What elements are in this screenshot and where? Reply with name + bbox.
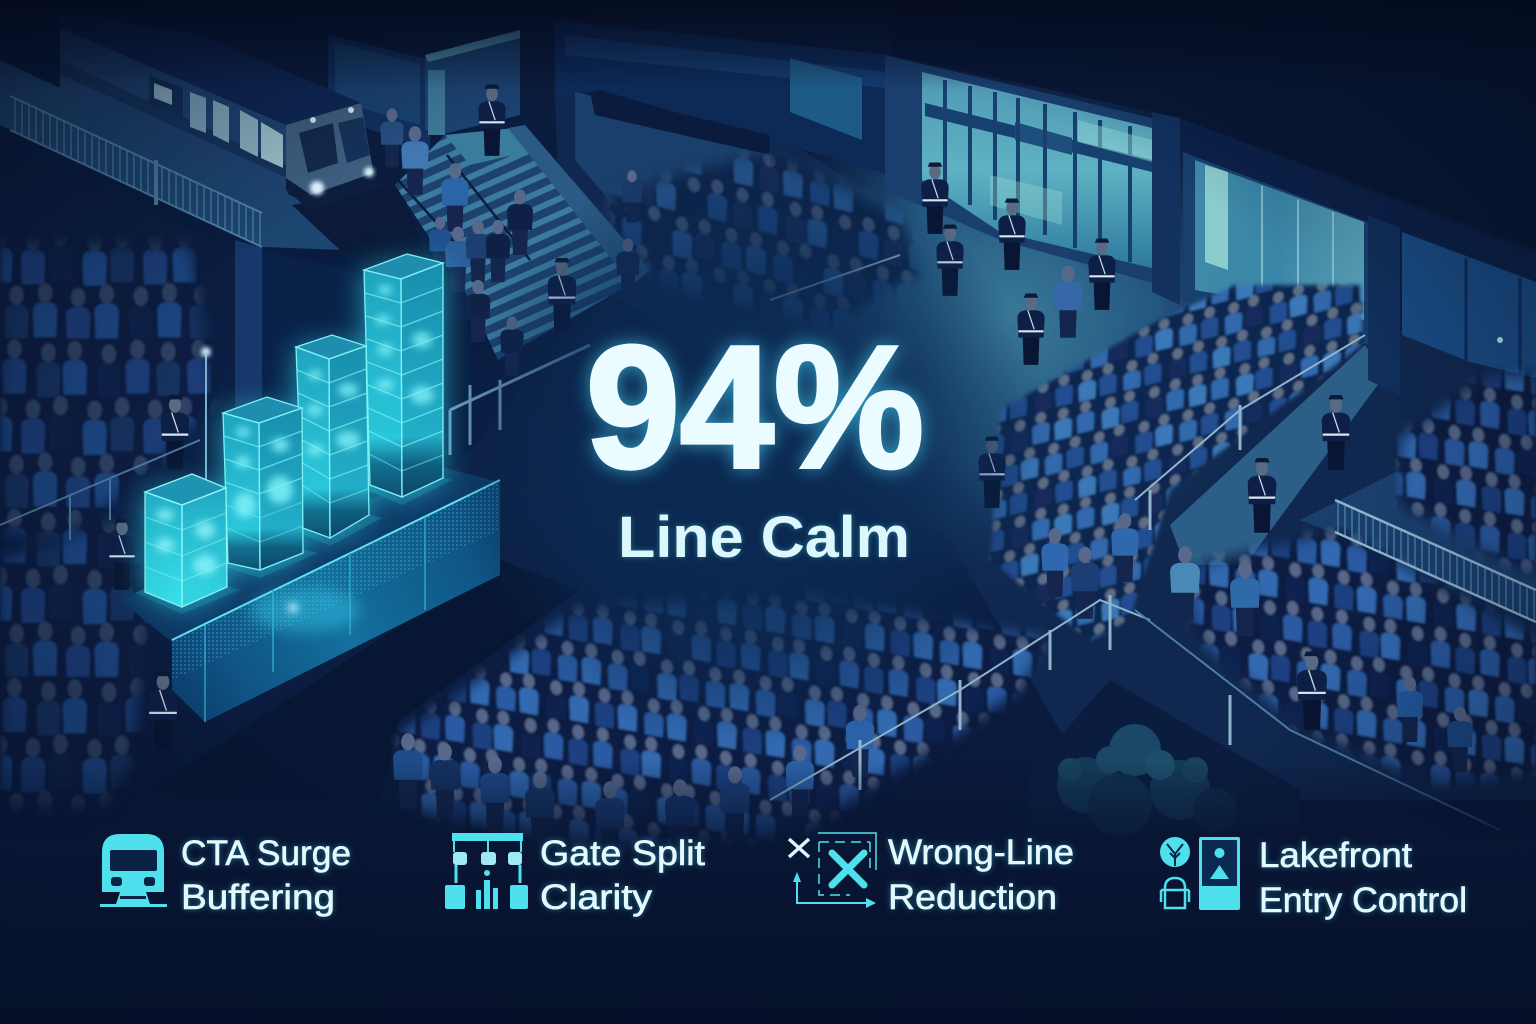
crowd: centre front <box>390 585 1060 860</box>
building: glass entrance 2 <box>1183 152 1368 345</box>
bottom fade <box>0 760 1536 1024</box>
feature: CTA Surge Buffering <box>100 834 351 917</box>
label: Wrong-Line Reduction: Wrong-Line <box>888 833 1074 872</box>
staff with sashes <box>108 162 1350 750</box>
central road and lower ground <box>150 560 580 800</box>
headline: 94%: 94% <box>586 309 924 504</box>
bars glow <box>145 263 443 607</box>
crowd: left upper <box>0 235 225 545</box>
crowd: left lower <box>0 519 148 812</box>
subheading: Line Calm: Line Calm <box>618 505 910 570</box>
column base slabs <box>135 465 452 614</box>
label: CTA Surge Buffering <box>181 834 351 917</box>
label: Wrong-Line Reduction <box>888 833 1074 917</box>
top fade <box>0 0 1536 90</box>
shadow behind headline <box>450 150 1050 750</box>
train headlights <box>310 107 374 195</box>
stanchion queue ropes <box>0 255 1500 830</box>
platform railing <box>10 96 262 247</box>
label: Lakefront Entry Control <box>1259 836 1467 920</box>
building: upper centre <box>555 20 890 215</box>
ground slab beneath columns <box>120 468 500 642</box>
stairs <box>395 125 650 360</box>
crowd: lower right <box>1170 520 1536 790</box>
label: CTA Surge Buffering: CTA Surge <box>181 834 351 873</box>
lamp post <box>201 347 211 480</box>
label: Lakefront Entry Control: Lakefront <box>1259 836 1412 875</box>
train <box>60 12 376 211</box>
front row people <box>393 513 1473 857</box>
label: Wrong-Line Reduction: Reduction <box>888 878 1057 917</box>
crowd: right queue <box>980 280 1370 650</box>
label: Gate Split Clarity: Clarity <box>540 878 653 917</box>
column 4 <box>364 254 443 497</box>
label: Lakefront Entry Control: Entry Control <box>1259 881 1467 920</box>
label: Gate Split Clarity: Gate Split <box>540 834 705 873</box>
label: CTA Surge Buffering: Buffering <box>181 878 335 917</box>
plaza floor <box>555 50 1536 800</box>
train windows <box>149 75 283 168</box>
feature: Lakefront Entry Control <box>1160 836 1467 920</box>
icon: entry control <box>1160 837 1240 910</box>
low wall and trees <box>1030 680 1300 837</box>
feature: Wrong-Line Reduction <box>789 833 1074 917</box>
column 3 <box>296 335 369 538</box>
bar chart: glowing stacked columns <box>135 254 452 614</box>
icon: wrong-line cross <box>789 833 876 908</box>
icon: train <box>100 834 167 907</box>
crowd: far right <box>1395 365 1536 580</box>
crowd: top centre <box>606 152 923 315</box>
icon: gate split <box>445 833 528 909</box>
train platform and wall <box>0 60 600 490</box>
people on stairs <box>380 84 642 375</box>
station kiosk <box>328 30 520 150</box>
lower right barrier railing <box>1335 500 1536 622</box>
glowing fence barrier <box>172 480 500 722</box>
column 1 <box>145 474 227 607</box>
building: glass entrance 1 <box>885 55 1160 285</box>
building: pillar and upper wall <box>890 0 1536 305</box>
building: right wing <box>1368 215 1536 395</box>
column 2 <box>223 397 303 570</box>
label: Gate Split Clarity <box>540 834 705 917</box>
feature: Gate Split Clarity <box>445 833 705 917</box>
